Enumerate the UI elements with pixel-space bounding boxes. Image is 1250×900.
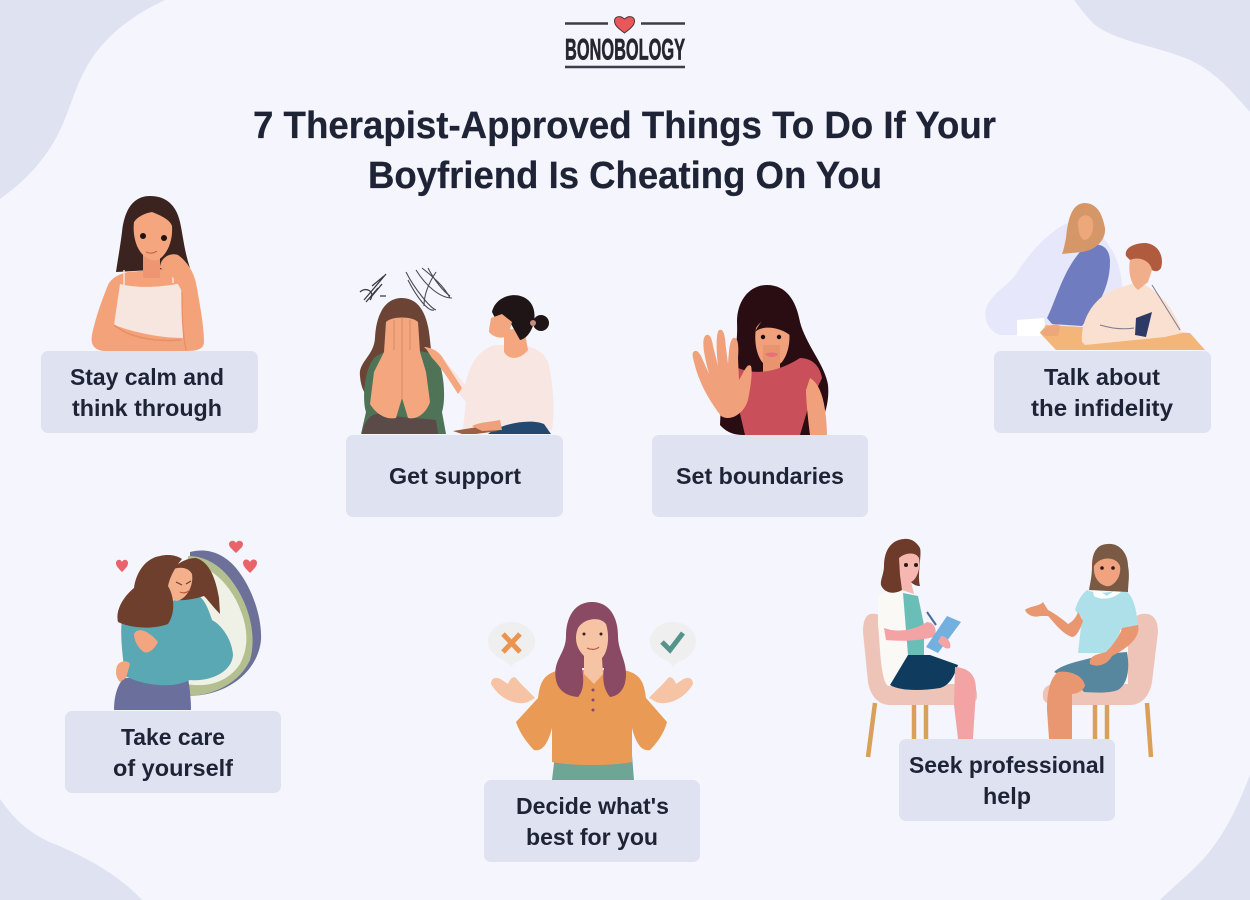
label box <box>484 780 700 862</box>
panel: get support <box>346 268 563 517</box>
logo: Bonobology <box>565 17 685 67</box>
logo: Bonobology: BONOBOLOGY <box>565 34 685 66</box>
label text: Decide what's <box>516 793 669 819</box>
label text <box>1031 364 1173 421</box>
label text <box>113 724 233 781</box>
icon: X bubble <box>488 622 535 668</box>
label text <box>516 793 669 850</box>
icon: heart <box>614 17 634 33</box>
label text: Talk about <box>1044 364 1160 390</box>
panel: take care of yourself <box>65 541 281 793</box>
label text: Set boundaries <box>676 463 844 489</box>
panel: decide what's best <box>484 602 700 862</box>
label text <box>909 752 1105 809</box>
illustration: client talking <box>1025 544 1158 757</box>
label box <box>652 435 868 517</box>
panel: stay calm <box>41 196 258 433</box>
illustration: couple talking <box>985 203 1205 350</box>
illustration: therapist with notes <box>863 539 977 757</box>
label text: help <box>983 783 1031 809</box>
label text: the infidelity <box>1031 395 1173 421</box>
illustration: friend comforting woman <box>360 268 553 434</box>
label box <box>41 351 258 433</box>
illustration: thinking woman <box>92 196 204 351</box>
icon: check bubble <box>650 622 696 668</box>
panel: set boundaries <box>652 285 868 517</box>
label box <box>899 739 1115 821</box>
label text: Take care <box>121 724 225 750</box>
label text: think through <box>72 395 222 421</box>
label box <box>994 351 1211 433</box>
panel: talk about infidelity <box>985 203 1211 433</box>
label text: Seek professional <box>909 752 1105 778</box>
panel: seek professional help <box>863 539 1158 821</box>
label box <box>346 435 563 517</box>
label text: Get support <box>389 463 521 489</box>
title: 7 Therapist-Approved Things To Do If Your <box>253 105 996 147</box>
label text: best for you <box>526 824 658 850</box>
label text: Stay calm and <box>70 364 224 390</box>
icons: hearts <box>116 541 257 573</box>
title <box>253 105 996 197</box>
illustration: woman hugging mirror reflection <box>114 551 261 710</box>
illustration: woman raising a hand <box>693 285 828 435</box>
illustration: woman weighing options <box>491 602 693 780</box>
label box <box>65 711 281 793</box>
title: Boyfriend Is Cheating On You <box>368 155 882 197</box>
label text: of yourself <box>113 755 233 781</box>
label text <box>70 364 224 421</box>
